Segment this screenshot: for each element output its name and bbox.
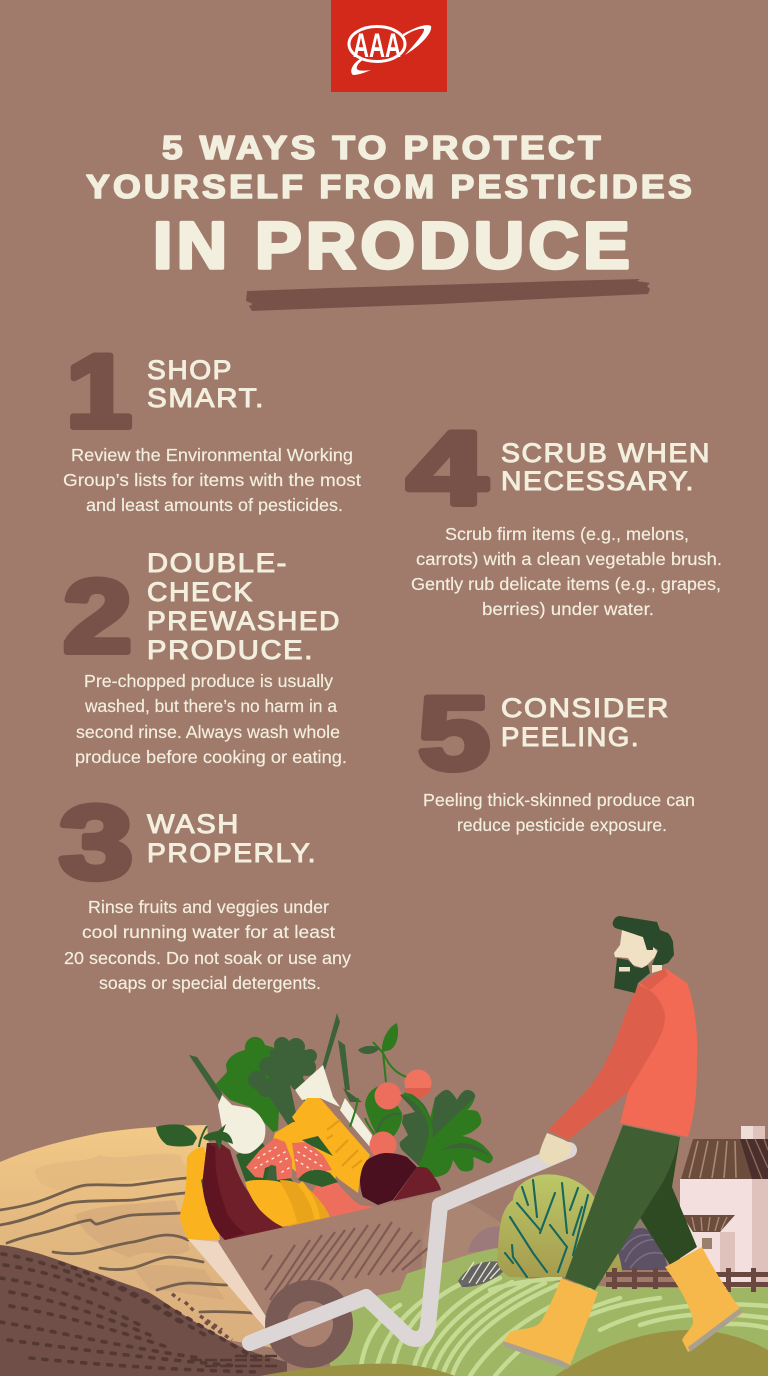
heading 2: CHECK [147, 577, 254, 607]
tip 3: wash properly [59, 785, 351, 993]
produce in wheelbarrow [156, 1013, 493, 1240]
oak leaf [420, 1090, 493, 1177]
eggplant [203, 1143, 285, 1240]
heading 4: SCRUB WHEN [501, 438, 711, 468]
heading 5: PEELING. [501, 722, 640, 752]
logo: AAA [331, 0, 447, 92]
body 3: Rinse fruits and veggies under [88, 897, 329, 917]
wheelbarrow [188, 1150, 569, 1368]
title underline brush stroke [246, 279, 650, 311]
bush with branches [497, 1174, 622, 1277]
hand [539, 1133, 572, 1165]
plant stems and leaves [373, 1042, 410, 1082]
strawberry 1 [246, 1138, 292, 1180]
heading 4: NECESSARY. [501, 466, 695, 496]
tray hatching [262, 1222, 428, 1300]
body 2: second rinse. Always wash whole [76, 722, 340, 742]
collar [640, 968, 668, 990]
tray [218, 1192, 442, 1322]
yellow pepper [180, 1147, 220, 1240]
yellow mango [292, 1098, 370, 1193]
tomatoes [374, 1082, 402, 1110]
heading 2: PREWASHED [147, 606, 341, 636]
sweater torso [620, 968, 697, 1137]
spring onion greens [189, 1055, 222, 1105]
title: 5 WAYS TO PROTECT [162, 129, 604, 166]
broccoli light [215, 1037, 282, 1132]
eggplant stem leaf [156, 1124, 197, 1146]
front boot [503, 1278, 598, 1365]
beet [360, 1153, 417, 1205]
heading 1: SMART. [147, 383, 265, 413]
number 4: 4 [407, 411, 487, 527]
number 1: 1 [66, 334, 132, 450]
back boot [665, 1247, 743, 1352]
broccoli dark [248, 1037, 317, 1125]
strawberry 2 [292, 1142, 332, 1178]
green field [330, 1248, 768, 1376]
heading 3: PROPERLY. [147, 838, 317, 868]
body 4: Gently rub delicate items (e.g., grapes, [411, 574, 721, 594]
body 4: carrots) with a clean vegetable brush. [416, 549, 722, 569]
body 4: Scrub firm items (e.g., melons, [445, 524, 689, 544]
cream side panel [188, 1239, 267, 1328]
onion bulb [218, 1095, 265, 1154]
body 5: Peeling thick-skinned produce can [423, 790, 695, 810]
body 2: washed, but there’s no harm in a [84, 696, 337, 716]
title: IN PRODUCE [153, 208, 634, 282]
coral fruit [310, 1180, 375, 1220]
heading 3: WASH [147, 809, 240, 839]
background hill and trees [420, 1195, 668, 1300]
body 3: soaps or special detergents. [99, 973, 321, 993]
green under produce [236, 1140, 300, 1190]
face [614, 930, 658, 968]
body 5: reduce pesticide exposure. [457, 815, 667, 835]
body 1: Review the Environmental Working [71, 445, 353, 465]
body 1: Group’s lists for items with the most [63, 470, 361, 490]
beard [614, 958, 650, 993]
tip 1: shop smart [63, 334, 361, 515]
heading 1: SHOP [147, 355, 233, 385]
tan ploughed hill [0, 1125, 285, 1350]
strawberry leaves [298, 1136, 338, 1187]
wheel [265, 1280, 353, 1368]
tip 2: double-check prewashed produce [63, 548, 347, 767]
neck [652, 965, 662, 973]
eggplant calyx [203, 1124, 233, 1150]
handles [250, 1150, 569, 1343]
heading 2: DOUBLE- [147, 548, 288, 578]
title: YOURSELF FROM PESTICIDES [86, 168, 695, 205]
number 3: 3 [59, 785, 133, 901]
heading 5: CONSIDER [501, 693, 670, 723]
logo: AAA: AAA [353, 27, 401, 65]
back leg [637, 1137, 697, 1265]
sweater sleeve [548, 985, 665, 1140]
hair [613, 916, 674, 965]
olive foreground hills [260, 1330, 768, 1376]
body 4: berries) under water. [482, 599, 654, 619]
tip 5: consider peeling [418, 676, 695, 835]
tip 4: scrub when necessary [407, 411, 722, 619]
body 1: and least amounts of pesticides. [86, 495, 343, 515]
number 5: 5 [418, 676, 490, 792]
body 3: 20 seconds. Do not soak or use any [64, 948, 351, 968]
onion 2 and 3 [295, 1065, 340, 1107]
front leg [565, 1125, 680, 1290]
number 2: 2 [63, 559, 132, 675]
farmhouse [680, 1126, 768, 1294]
body 3: cool running water for at least [82, 922, 335, 942]
body 2: Pre-chopped produce is usually [84, 671, 333, 691]
farmer [503, 916, 743, 1369]
heading 2: PRODUCE. [147, 635, 314, 665]
pumpkin [280, 1180, 330, 1227]
dirt mound [0, 1245, 287, 1376]
fence [606, 1268, 768, 1292]
body 2: produce before cooking or eating. [75, 747, 347, 767]
title [86, 129, 695, 282]
